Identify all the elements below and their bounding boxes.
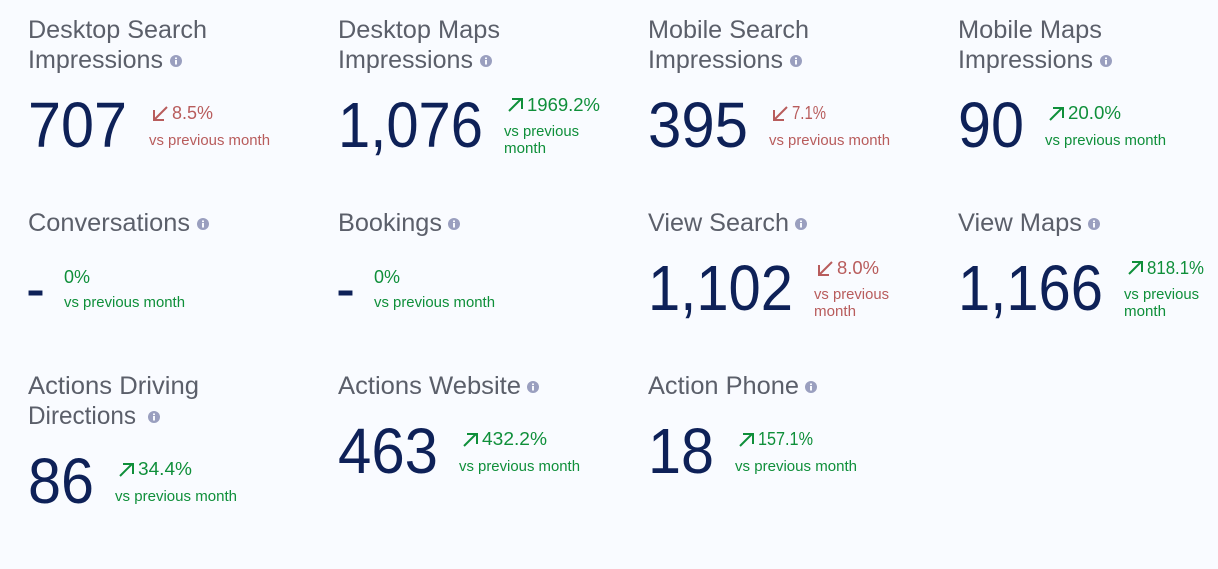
value: 395	[648, 89, 748, 161]
change: 7.1%	[792, 103, 826, 123]
heading: Desktop Search	[28, 16, 207, 44]
panel: Desktop Search Impressions	[28, 16, 270, 161]
panel: View Maps	[958, 209, 1204, 324]
value: 90	[958, 89, 1024, 161]
value: 1,102	[648, 252, 793, 324]
heading: Bookings	[338, 209, 442, 237]
comparison note: vs previous month	[735, 459, 857, 475]
change: 432.2%	[482, 429, 547, 449]
heading	[958, 16, 1102, 74]
arrow: down	[774, 107, 787, 120]
change: 0%	[64, 267, 90, 287]
change: 20.0%	[1068, 103, 1121, 123]
panel: View Search	[648, 209, 889, 324]
heading: View Maps	[958, 209, 1082, 237]
change: 1969.2%	[527, 95, 600, 115]
comparison note: vs previous	[814, 287, 889, 303]
heading: Actions Driving	[28, 372, 199, 400]
value: 18	[648, 415, 714, 487]
comparison note	[504, 124, 579, 157]
panel: Desktop Maps Impressions	[338, 16, 600, 161]
heading: View Search	[648, 209, 789, 237]
arrow: up	[1129, 262, 1142, 274]
heading: Desktop Maps	[338, 16, 500, 44]
heading: Action Phone	[648, 372, 799, 400]
arrow: up	[1050, 108, 1063, 120]
value: 86	[28, 445, 94, 517]
arrow: up	[509, 99, 522, 111]
comparison note	[1124, 287, 1199, 320]
arrow: down	[154, 107, 167, 120]
arrow: up	[740, 434, 753, 446]
heading	[648, 16, 809, 74]
value: -	[26, 252, 45, 324]
value: 463	[338, 415, 438, 487]
heading: Mobile Search	[648, 16, 809, 44]
icon: info	[795, 218, 807, 230]
change: 8.5%	[172, 103, 213, 123]
panel: Actions Website	[338, 372, 580, 487]
panel: Action Phone	[648, 372, 857, 487]
icon: info	[527, 381, 539, 393]
heading: Impressions	[958, 46, 1093, 74]
heading: Impressions	[648, 46, 783, 74]
comparison note: vs previous month	[769, 133, 890, 149]
heading	[338, 16, 500, 74]
arrow: down	[819, 262, 832, 275]
heading: Impressions	[338, 46, 473, 74]
comparison note: vs previous month	[149, 133, 270, 149]
icon: info	[170, 55, 182, 67]
icon: info	[805, 381, 817, 393]
icon: info	[480, 55, 492, 67]
value: 707	[28, 89, 127, 161]
heading	[28, 372, 199, 430]
comparison note: vs previous month	[1045, 133, 1166, 149]
icon: info	[448, 218, 460, 230]
value: 1,076	[338, 89, 483, 161]
arrow: up	[120, 464, 133, 476]
panel: Conversations	[26, 209, 209, 324]
change: 0%	[374, 267, 400, 287]
change: 34.4%	[138, 459, 192, 479]
change: 157.1%	[758, 429, 813, 449]
change: 8.0%	[837, 258, 879, 278]
comparison note	[814, 287, 889, 320]
panel: Mobile Search Impressions	[648, 16, 890, 161]
icon: info	[197, 218, 209, 230]
value: 1,166	[958, 252, 1103, 324]
comparison note: vs previous month	[459, 459, 580, 475]
heading: Impressions	[28, 46, 163, 74]
panel: Mobile Maps Impressions	[958, 16, 1166, 161]
heading: Actions Website	[338, 372, 521, 400]
icon: info	[148, 411, 160, 423]
panel: Actions Driving Directions	[28, 372, 237, 517]
change: 818.1%	[1147, 258, 1204, 278]
heading: Mobile Maps	[958, 16, 1102, 44]
comparison note: vs previous month	[64, 295, 185, 311]
icon: info	[1100, 55, 1112, 67]
comparison note: vs previous month	[115, 489, 237, 505]
panel: Bookings	[336, 209, 495, 324]
icon: info	[790, 55, 802, 67]
comparison note: vs previous month	[374, 295, 495, 311]
comparison note: vs previous	[504, 124, 579, 140]
heading	[28, 16, 207, 74]
heading: Conversations	[28, 209, 190, 237]
comparison note: month	[504, 141, 546, 157]
comparison note: vs previous	[1124, 287, 1199, 303]
comparison note: month	[814, 304, 856, 320]
value: -	[336, 252, 355, 324]
arrow: up	[464, 434, 477, 446]
icon: info	[1088, 218, 1100, 230]
heading: Directions	[28, 402, 136, 430]
comparison note: month	[1124, 304, 1166, 320]
